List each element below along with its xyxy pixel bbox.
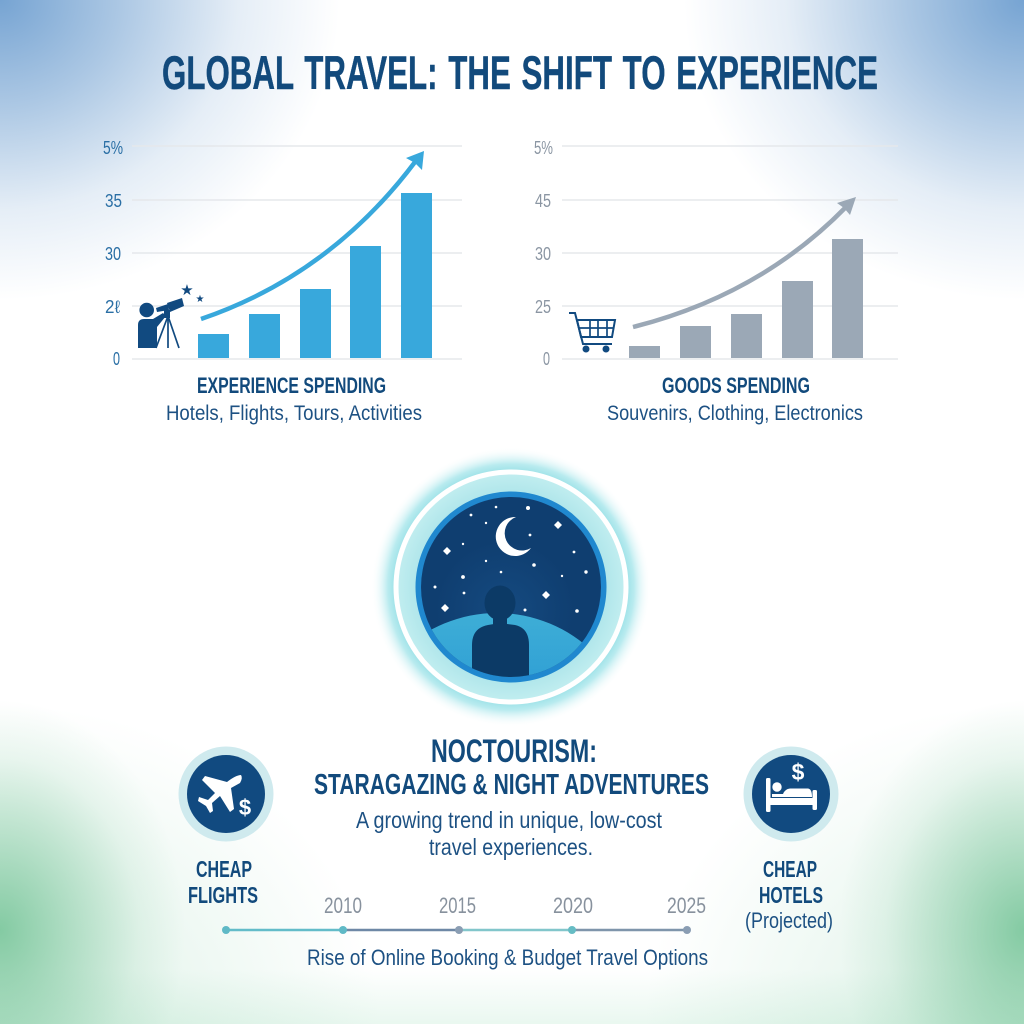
timeline	[222, 893, 706, 934]
panel: experience spending chart	[103, 138, 462, 425]
timeline years: 2015	[439, 893, 476, 918]
label: cheap hotels: CHEAP	[763, 856, 817, 882]
label: cheap hotels: HOTELS	[759, 882, 823, 908]
label: cheap flights: CHEAP	[196, 856, 252, 882]
bars: goods spending	[629, 239, 863, 358]
label: cheap hotels	[745, 856, 833, 933]
icon: stargazer with telescope: ★	[180, 281, 194, 299]
arrow: experience trend	[201, 151, 424, 319]
panel: goods spending chart	[534, 138, 898, 425]
text block: noctourism description	[356, 807, 663, 860]
icon: crescent moon	[496, 517, 531, 556]
y-axis labels: goods	[534, 138, 553, 369]
y-axis labels: experience: 5%	[103, 138, 123, 158]
y-axis labels: goods: 5%	[534, 138, 553, 158]
timeline caption: Rise of Online Booking & Budget Travel Options	[307, 945, 708, 970]
icon: cheap hotels: $	[792, 759, 805, 785]
heading: noctourism: STARAGAZING & NIGHT ADVENTURES	[314, 769, 709, 801]
icon: stargazer with telescope	[138, 281, 205, 348]
timeline years: 2020	[553, 893, 593, 918]
y-axis labels: goods: 25	[535, 297, 551, 317]
y-axis labels: goods: 0	[543, 349, 550, 369]
timeline years: 2010	[324, 893, 362, 918]
caption: goods spending: GOODS SPENDING	[662, 373, 810, 398]
y-axis labels: experience: 0	[113, 349, 120, 369]
caption: goods spending	[607, 373, 863, 425]
infographic canvas	[104, 56, 898, 970]
stars	[434, 506, 588, 613]
y-axis labels: experience: 2ℓ	[105, 297, 120, 317]
y-axis labels: goods: 45	[535, 191, 551, 211]
label: cheap flights: FLIGHTS	[188, 882, 258, 908]
caption: goods spending: Souvenirs, Clothing, Electronics	[607, 402, 863, 425]
caption: experience spending: Hotels, Flights, Tours, Activities	[166, 402, 422, 425]
label: cheap hotels: (Projected)	[745, 908, 833, 933]
text block: noctourism description: travel experiences.	[429, 834, 593, 860]
caption: experience spending	[166, 373, 422, 425]
icon: cheap hotels	[744, 746, 838, 842]
icon: shopping cart	[569, 313, 615, 352]
y-axis labels: goods: 30	[535, 244, 551, 264]
icon: cheap flights	[178, 746, 274, 842]
y-axis labels: experience: 30	[105, 244, 121, 264]
heading: noctourism: NOCTOURISM:	[431, 733, 597, 769]
silhouette: person	[472, 586, 529, 680]
y-axis labels: experience	[103, 138, 123, 369]
label: cheap flights	[188, 856, 258, 908]
timeline years: 2025	[667, 893, 706, 918]
heading: noctourism	[314, 733, 709, 801]
bars: experience spending	[198, 193, 432, 358]
y-axis labels: experience: 35	[105, 191, 122, 211]
arrow: goods trend	[633, 197, 856, 327]
timeline years	[324, 893, 706, 918]
caption: experience spending: EXPERIENCE SPENDING	[197, 373, 386, 398]
icon: cheap flights: $	[239, 795, 251, 820]
icon: stargazer with telescope: ★	[196, 294, 205, 305]
central badge: stargazer at night	[377, 453, 646, 722]
text block: noctourism description: A growing trend in unique, low-cost	[356, 807, 663, 833]
